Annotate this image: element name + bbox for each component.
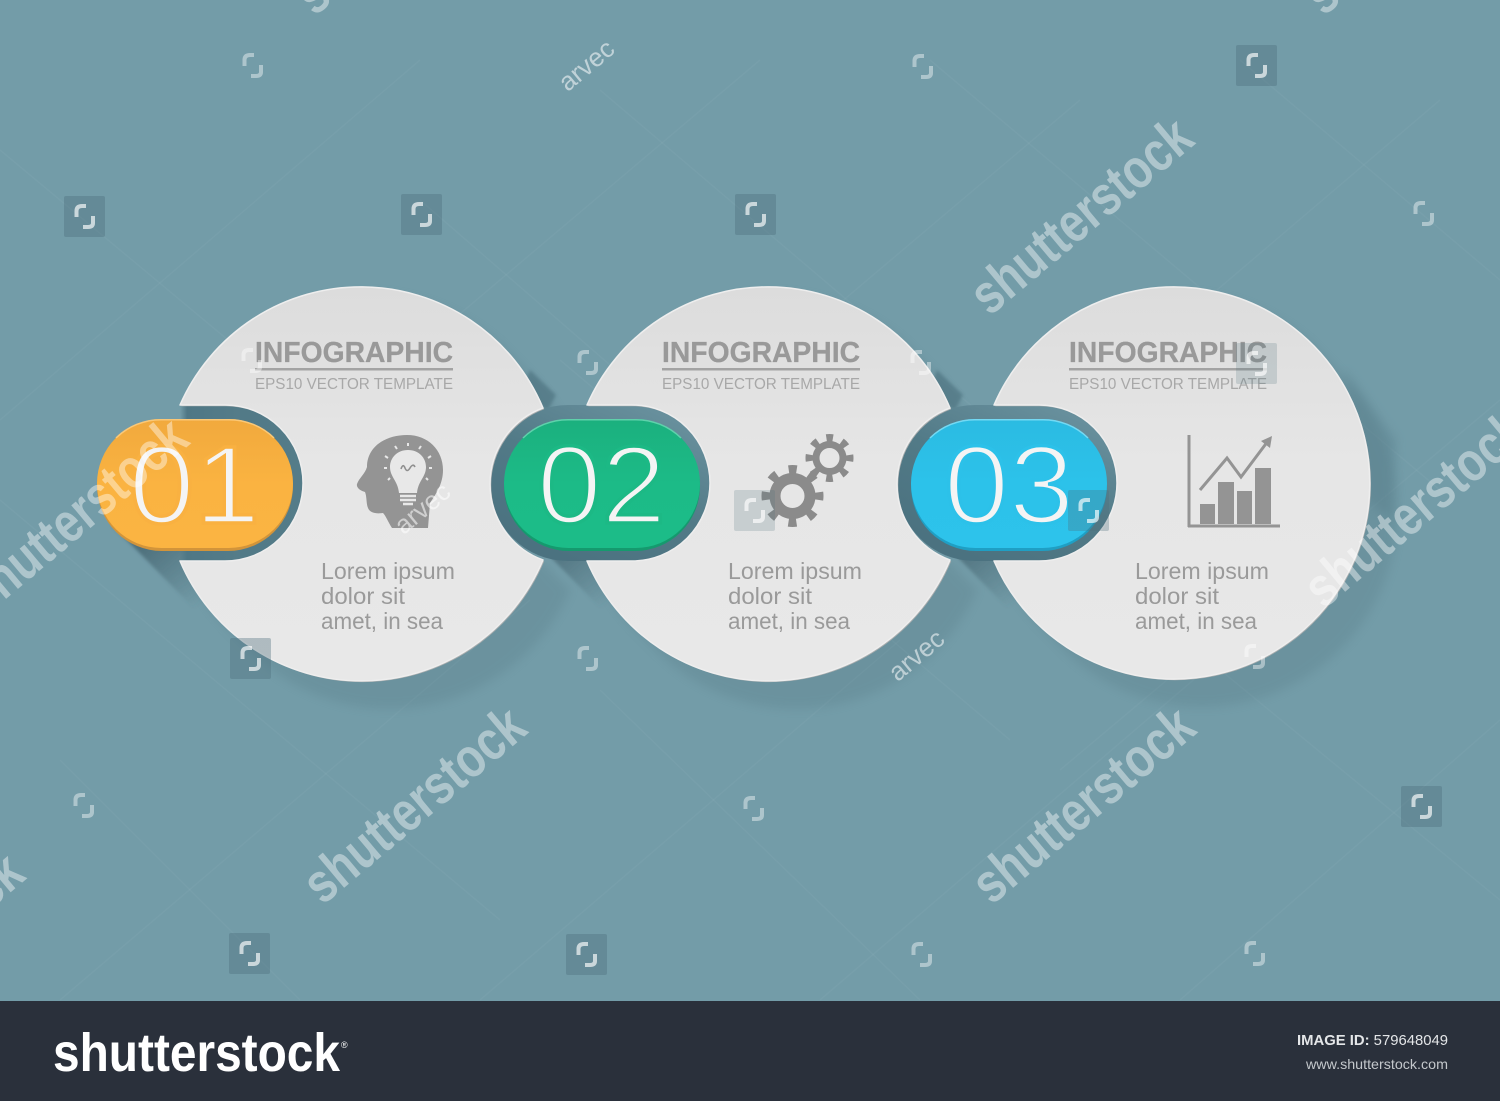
body text 1 [321, 558, 455, 634]
watermark author text: arvec [388, 476, 456, 540]
heading 1 [255, 337, 453, 393]
long shadows [112, 293, 1398, 709]
heading 3: EPS10 VECTOR TEMPLATE [1069, 376, 1267, 393]
heading 2: INFOGRAPHIC [662, 337, 860, 369]
notch recesses behind the number pills [160, 405, 1119, 561]
heading 2 [662, 337, 860, 393]
body text 2 [728, 558, 862, 634]
watermark author text: arvec [882, 623, 950, 687]
watermark square badges [64, 45, 1442, 975]
number pill 02 [504, 419, 700, 551]
number pill 01: 01 [129, 424, 260, 547]
number pill 03 [911, 419, 1107, 551]
footer bar [0, 1001, 1500, 1101]
number pill 03: 03 [944, 424, 1074, 547]
number pill 01 [97, 419, 293, 551]
heading 3: INFOGRAPHIC [1069, 337, 1267, 369]
icon: bar chart with rising arrow [1188, 435, 1280, 528]
panel: step 1 [97, 287, 544, 682]
image id: IMAGE ID: 579648049 [1297, 1032, 1448, 1049]
body text 1: dolor sit [321, 583, 406, 609]
body text 2: dolor sit [728, 583, 813, 609]
registered mark: ® [341, 1040, 348, 1050]
watermark text: shutterstock [957, 104, 1205, 326]
panel: step 3 [911, 287, 1371, 680]
website: www.shutterstock.com [1305, 1056, 1448, 1072]
heading 1: EPS10 VECTOR TEMPLATE [255, 376, 453, 393]
watermark author text: arvec [552, 33, 620, 97]
heading 2: EPS10 VECTOR TEMPLATE [662, 376, 860, 393]
watermark small marks [76, 55, 1432, 965]
watermark text: shutterstock [959, 693, 1207, 915]
disc 1 [180, 287, 544, 682]
icon: gears [766, 438, 850, 522]
body text 3: amet, in sea [1135, 608, 1257, 634]
panel: step 2 [504, 287, 951, 682]
body text 3 [1135, 558, 1269, 634]
disc 3 [994, 287, 1371, 680]
body text 3: dolor sit [1135, 583, 1220, 609]
body text 3: Lorem ipsum [1135, 558, 1269, 584]
body text 2: Lorem ipsum [728, 558, 862, 584]
body text 1: amet, in sea [321, 608, 443, 634]
watermark author text [388, 33, 950, 687]
heading 3 [1069, 337, 1267, 393]
icon: head with light bulb [357, 435, 443, 528]
number pill 02: 02 [537, 424, 666, 547]
body text 1: Lorem ipsum [321, 558, 455, 584]
heading 1: INFOGRAPHIC [255, 337, 453, 369]
watermark text: shutterstock [290, 693, 538, 915]
body text 2: amet, in sea [728, 608, 850, 634]
footer logo: shutterstock [53, 1023, 341, 1083]
disc 2 [587, 287, 951, 682]
